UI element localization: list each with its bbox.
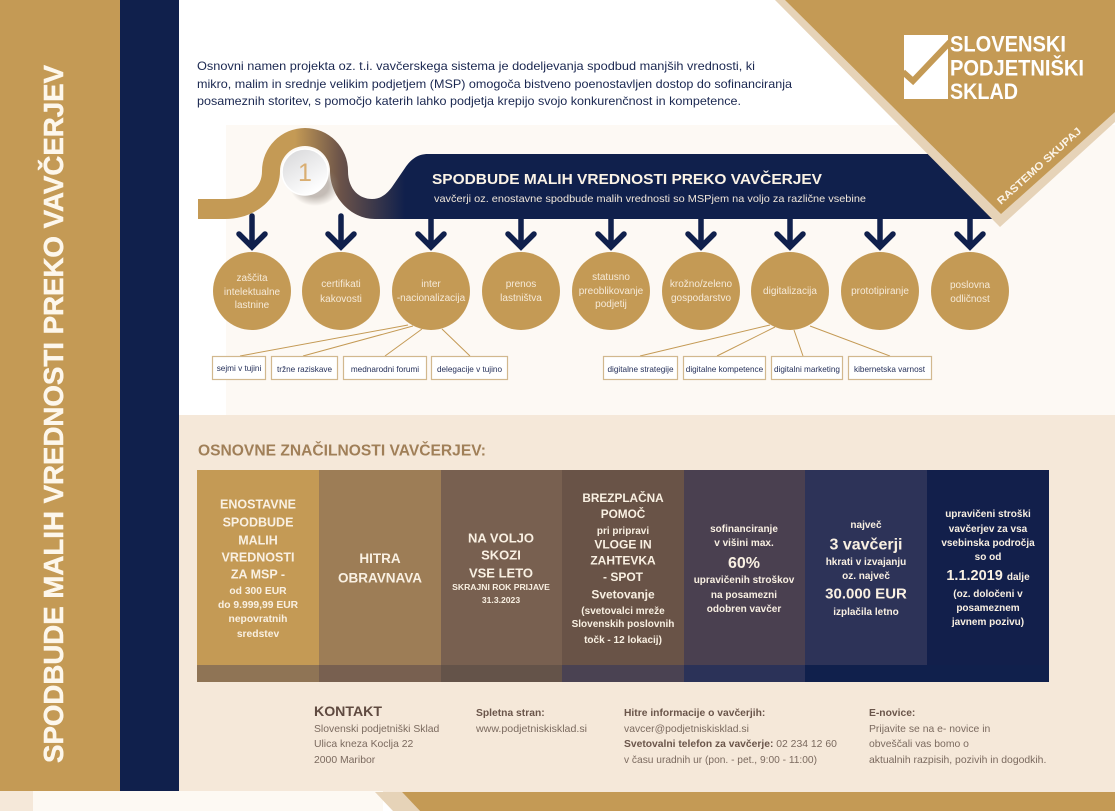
circle: krožno (662, 252, 740, 330)
column 3: VSE LETO (469, 566, 533, 580)
column 3: NA VOLJO (468, 530, 534, 546)
column 7: (oz. določeni v (953, 589, 1023, 600)
box: digitalne kompetence: digitalne kompetence (686, 365, 764, 374)
column 7: 1.1.2019 dalje (946, 568, 1030, 584)
column 4: POMOČ (601, 507, 646, 521)
circle: internacionalizacija (392, 252, 470, 330)
footer: newsletter: aktualnih razpisih, pozivih in dogodkih. (869, 755, 1046, 766)
column 7: so od (975, 552, 1001, 563)
column 1: ZA MSP - (231, 568, 285, 582)
logo text: PODJETNIŠKI (950, 56, 1084, 80)
column 4: ZAHTEVKA (590, 554, 656, 568)
column 1: SPODBUDE (223, 516, 293, 530)
connector lines (240, 325, 890, 356)
column 7: javnem pozivu) (951, 617, 1024, 628)
logo mark (903, 35, 950, 99)
vertical title: SPODBUDE MALIH VREDNOSTI PREKO VAVČERJEV (37, 65, 69, 763)
circle: prototipiranje: prototipiranje (851, 286, 909, 297)
circle: krožno: gospodarstvo (671, 293, 731, 304)
column 6 (805, 470, 927, 682)
column 7: vavčerjev za vsa (949, 524, 1028, 535)
footer: contact: KONTAKT (314, 704, 383, 719)
column 1: od 300 EUR (229, 586, 287, 597)
footer: newsletter: obveščali vas bomo o (869, 739, 969, 750)
circle: certifikati (302, 252, 380, 330)
column 5: na posamezni (711, 590, 777, 601)
column 1: MALIH (238, 534, 278, 548)
box: kibernetska varnost: kibernetska varnost (854, 365, 926, 374)
circle: prenos: prenos (506, 279, 536, 290)
intro text: mikro, malim in srednje velikim podjetjem (MSP) omogoča bistveno poenostavljen dostop do sofinanciranja (197, 78, 793, 91)
column 3: SKOZI (481, 548, 521, 562)
column 2 (319, 470, 441, 682)
slogan: RASTEMO SKUPAJ (995, 125, 1084, 207)
box: digitalne strategije (604, 356, 678, 380)
circle: statusno: preoblikovanje (579, 286, 644, 297)
footer: contact (314, 704, 440, 766)
feature columns (197, 470, 1049, 682)
column 6: največ (850, 520, 882, 531)
column 4: točk - 12 lokacij) (584, 635, 662, 646)
logo text: SKLAD (950, 79, 1018, 104)
column 3 (441, 470, 562, 682)
footer: web: Spletna stran: (476, 708, 545, 719)
footer: contact: 2000 Maribor (314, 755, 376, 766)
column 6: izplačila letno (833, 607, 899, 618)
box: digitalne strategije: digitalne strategije (608, 365, 674, 374)
column 2: HITRA (359, 551, 401, 566)
top-right logo triangle (775, 0, 1115, 227)
column 7: upravičeni stroški (945, 509, 1031, 520)
column 7: posameznem (956, 603, 1020, 614)
circle: digitalizacija (751, 252, 829, 330)
logo text (950, 32, 1084, 104)
footer: contact: Ulica kneza Koclja 22 (314, 739, 414, 750)
column 5: v višini max. (714, 538, 774, 549)
circle: prenos (482, 252, 560, 330)
column 6: 3 vavčerji (830, 536, 902, 554)
footer: quick info: Hitre informacije o vavčerjih: (624, 708, 765, 719)
panel: footer beige background (179, 415, 1115, 792)
circle: poslovna: poslovna (950, 280, 990, 291)
footer: web (475, 708, 587, 735)
column 7 (927, 470, 1049, 682)
footer: quick info: Svetovalni telefon za vavčerje: 02 234 12 60 (624, 739, 837, 750)
sub-boxes (212, 356, 932, 380)
box: tržne: tržne raziskave (277, 365, 332, 374)
column 6: hkrati v izvajanju (826, 557, 906, 568)
circle: poslovna: odličnost (950, 294, 990, 305)
column 3: 31.3.2023 (482, 595, 520, 605)
intro text: Osnovni namen projekta oz. t.i. vavčerskega sistema je dodeljevanja spodbud manjših vrednosti, ki (197, 60, 755, 73)
column 5: 60% (728, 555, 760, 572)
column 4: VLOGE IN (594, 538, 652, 552)
column 4: BREZPLAČNA (582, 491, 664, 505)
column 6: 30.000 EUR (825, 586, 907, 602)
column 4: (svetovalci mreže (581, 606, 665, 617)
footer: quick info (624, 708, 837, 766)
box: sejmi (212, 356, 266, 380)
section heading: OSNOVNE ZNAČILNOSTI VAVČERJEV: (198, 442, 486, 460)
column 1: ENOSTAVNE (220, 498, 296, 512)
circle: zaščita: lastnine (235, 300, 270, 311)
topic circles (213, 252, 1009, 330)
circle: internacionalizacija: -nacionalizacija (397, 293, 466, 304)
bottom band (0, 791, 1115, 811)
column 1: VREDNOSTI (222, 550, 294, 564)
circle: zaščita: intelektualne (224, 287, 281, 298)
panel: navy column (120, 0, 179, 791)
box: mednarodni: mednarodni forumi (351, 365, 419, 374)
column 4: - SPOT (603, 570, 644, 584)
circle: certifikati: certifikati (321, 279, 361, 290)
column 1: do 9.999,99 EUR (218, 600, 299, 611)
column 1: sredstev (237, 629, 279, 640)
column 5 (684, 470, 805, 682)
circle: zaščita: zaščita (236, 273, 268, 284)
column 7: vsebinska področja (941, 538, 1035, 549)
column 5: odobren vavčer (707, 604, 781, 615)
column 1: nepovratnih (229, 614, 287, 625)
circle: certifikati: kakovosti (320, 294, 362, 305)
logo text: SLOVENSKI (950, 32, 1066, 56)
column 3: SKRAJNI ROK PRIJAVE (452, 582, 550, 592)
panel: left gold column with vertical title (0, 0, 120, 791)
number badge 1 (282, 149, 340, 206)
circle: statusno: statusno (592, 272, 630, 283)
column 5: upravičenih stroškov (694, 575, 795, 586)
circle: digitalizacija: digitalizacija (763, 286, 817, 297)
circle: internacionalizacija: inter (421, 279, 441, 290)
box: kibernetska varnost (848, 356, 932, 380)
box: digitalni marketing: digitalni marketing (774, 365, 840, 374)
footer: quick info: v času uradnih ur (pon. - pet., 9:00 - 11:00) (624, 755, 817, 766)
circle: zaščita (213, 252, 291, 330)
box: delegacije (432, 356, 508, 380)
circle: krožno: krožno/zeleno (670, 279, 733, 290)
footer: web: www.podjetniskisklad.si (475, 724, 587, 735)
number badge 1: 1 (298, 159, 312, 187)
box: digitalne kompetence (684, 356, 766, 380)
box: mednarodni (344, 356, 426, 380)
box: digitalni marketing (772, 356, 842, 380)
banner heading: SPODBUDE MALIH VREDNOSTI PREKO VAVČERJEV (432, 170, 822, 188)
arrows (239, 216, 983, 247)
circle: statusno: podjetij (595, 299, 627, 310)
footer: newsletter: Prijavite se na e- novice in (869, 724, 991, 735)
box: tržne (272, 356, 338, 380)
column 4: Slovenskih poslovnih (572, 619, 674, 630)
column 1 (197, 470, 319, 682)
box: sejmi: sejmi v tujini (217, 364, 261, 373)
circle: prototipiranje (841, 252, 919, 330)
footer: newsletter: E-novice: (869, 708, 915, 719)
circle: statusno (572, 252, 650, 330)
footer: newsletter (869, 708, 1046, 766)
footer: contact: Slovenski podjetniški Sklad (314, 724, 440, 735)
banner subtitle: vavčerji oz. enostavne spodbude malih vrednosti so MSPjem na voljo za različne vsebine (434, 193, 866, 205)
column 4: Svetovanje (591, 588, 655, 602)
column 4 (562, 470, 684, 682)
ribbon banner (198, 128, 1000, 219)
column 4: pri pripravi (597, 526, 649, 537)
footer: quick info: vavcer@podjetniskisklad.si (624, 724, 749, 735)
column 5: sofinanciranje (710, 524, 778, 535)
box: delegacije: delegacije v tujino (437, 365, 502, 374)
circle: poslovna (931, 252, 1009, 330)
circle: prenos: lastništva (500, 293, 542, 304)
column 2: OBRAVNAVA (338, 570, 422, 586)
intro text (197, 60, 793, 108)
intro text: posameznih storitev, s pomočjo katerih lahko podjetja krepijo svojo konkurenčnost in kompetence. (197, 95, 741, 108)
column 6: oz. največ (842, 571, 890, 582)
